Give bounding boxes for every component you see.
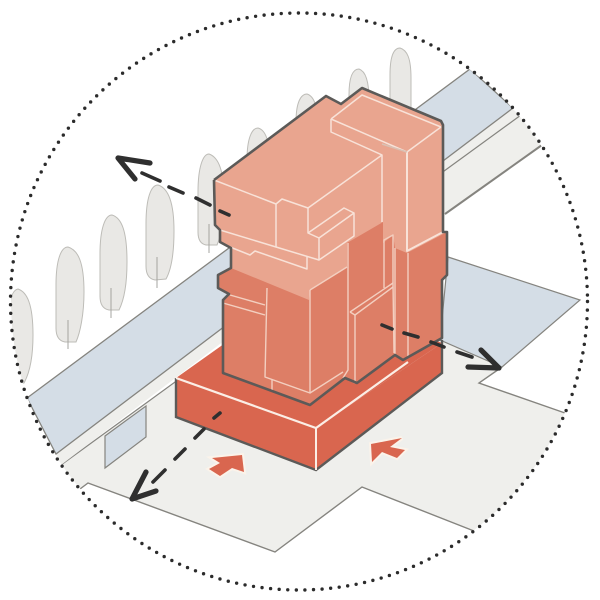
tower silhouette upper mass <box>214 88 447 405</box>
entry arrow left <box>209 455 244 476</box>
arrow: northwest view <box>118 158 229 215</box>
tree stems <box>68 224 209 349</box>
small water square <box>105 406 146 468</box>
podium left face <box>176 378 316 470</box>
tree 2 <box>56 247 84 342</box>
tree 7 <box>296 94 316 118</box>
tree 4 <box>146 185 174 280</box>
tree 9 <box>390 48 411 110</box>
tree 6 <box>246 128 268 154</box>
pavement edge lines <box>440 115 542 214</box>
tower <box>214 88 447 405</box>
entry arrow right <box>371 438 405 462</box>
podium base <box>176 290 442 470</box>
tree 1 <box>8 289 33 383</box>
arrow: southwest view <box>132 413 220 499</box>
water canal <box>27 69 513 454</box>
tree 8 <box>348 68 369 96</box>
trees <box>8 48 411 383</box>
tower outline <box>214 88 447 405</box>
pavement strip <box>444 116 540 215</box>
arrow: east view <box>382 325 499 368</box>
podium right face <box>316 343 442 470</box>
water plot right <box>440 257 580 367</box>
upper mass facade lines <box>214 95 443 269</box>
ground plot <box>50 340 600 552</box>
road strip <box>56 108 521 465</box>
tower lower mass <box>218 222 447 405</box>
tree 3 <box>100 215 127 310</box>
tree 5 <box>198 154 224 245</box>
lower mass facade lines <box>223 235 408 393</box>
podium top face <box>176 290 442 428</box>
